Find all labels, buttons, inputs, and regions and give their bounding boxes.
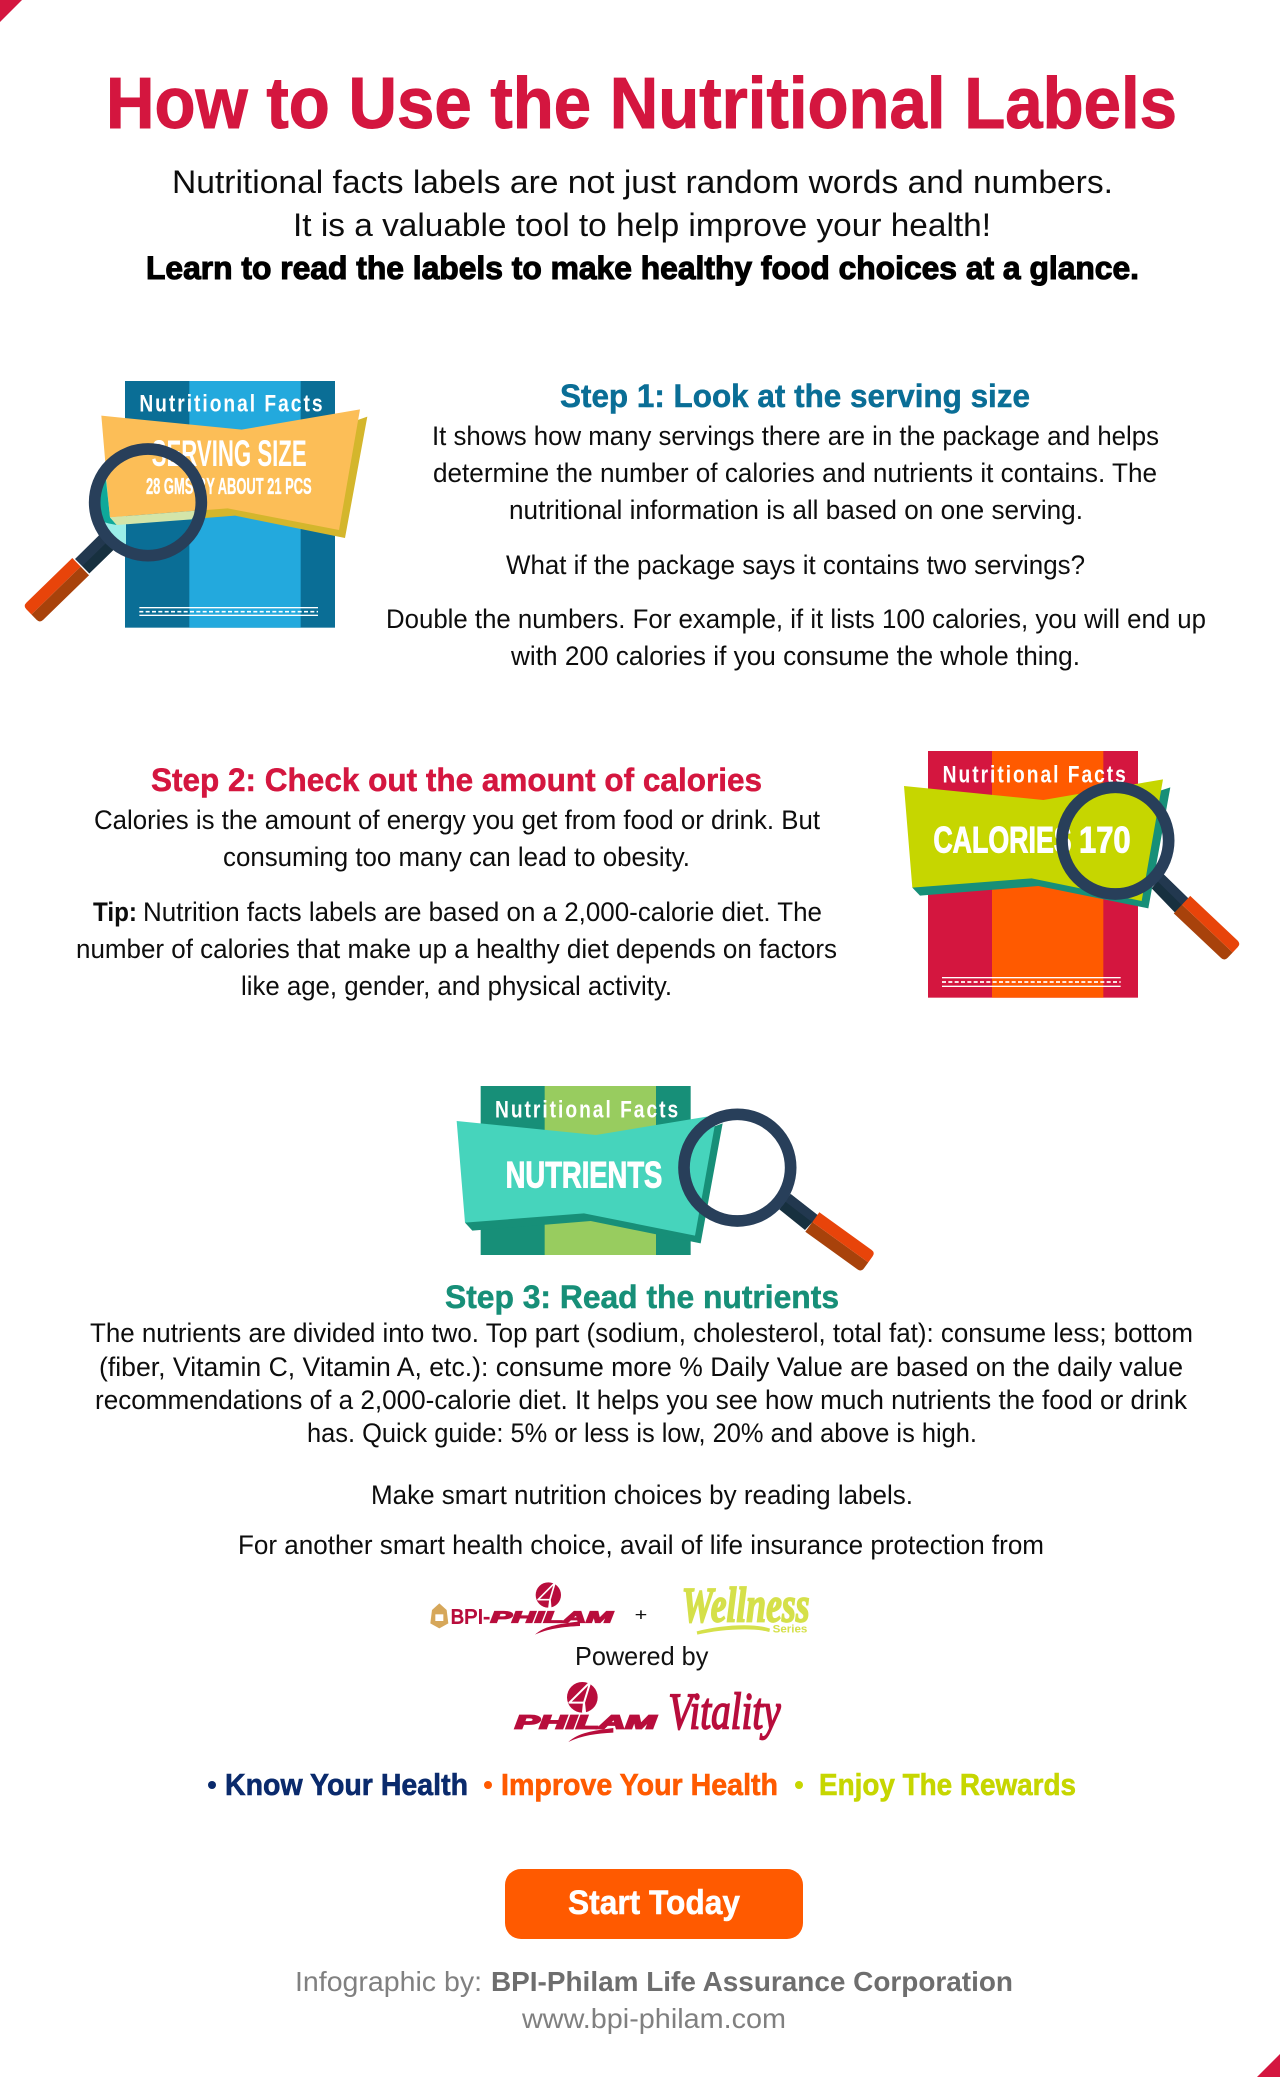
illustration: calories label with magnifier: CALORIES bbox=[933, 819, 1072, 860]
step 1 text: nutritional information is all based on one serving. bbox=[509, 495, 1083, 525]
illustration: serving size label with magnifier bbox=[23, 381, 367, 628]
illustration: calories label with magnifier bbox=[904, 751, 1241, 998]
credits bbox=[295, 1966, 1013, 2034]
step 2 text: Tip: bbox=[93, 897, 137, 927]
step 3 text bbox=[90, 1279, 1193, 1448]
step 2 text: Calories is the amount of energy you get from food or drink. But bbox=[94, 805, 821, 835]
logo: BPI-Philam: PHILAM bbox=[491, 1609, 615, 1626]
illustration: nutrients label with magnifier: NUTRIENTS bbox=[506, 1154, 662, 1195]
step 2 text: number of calories that make up a healthy diet depends on factors bbox=[76, 934, 837, 964]
title: How to Use the Nutritional Labels bbox=[106, 64, 1177, 144]
intro text block bbox=[146, 164, 1139, 286]
logo: Wellness Series bbox=[682, 1577, 810, 1636]
illustration: nutrients label with magnifier bbox=[457, 1086, 875, 1272]
corner accent: bottom right bbox=[1257, 2054, 1280, 2077]
illustration: serving size label with magnifier: Nutritional Facts bbox=[139, 390, 323, 417]
step 1 text: Double the numbers. For example, if it lists 100 calories, you will end up bbox=[386, 604, 1206, 634]
step 3 text: The nutrients are divided into two. Top part (sodium, cholesterol, total fat): consume less; bottom bbox=[90, 1318, 1193, 1348]
credits: BPI-Philam Life Assurance Corporation bbox=[491, 1966, 1013, 1997]
step 2 text bbox=[76, 762, 837, 1001]
step 1 text: What if the package says it contains two servings? bbox=[506, 550, 1085, 580]
logo: Wellness Series: Wellness bbox=[682, 1577, 810, 1633]
step 2 text: Step 2: Check out the amount of calories bbox=[151, 762, 762, 798]
step 3 text: has. Quick guide: 5% or less is low, 20% and above is high. bbox=[307, 1418, 977, 1448]
illustration: calories label with magnifier: Nutritional Facts bbox=[943, 761, 1126, 788]
credits: Infographic by: bbox=[295, 1966, 482, 1997]
closing text bbox=[238, 1480, 1044, 1560]
illustration: serving size label with magnifier: 28 GMS BY ABOUT 21 PCS bbox=[146, 473, 312, 499]
illustration: nutrients label with magnifier: Nutritional Facts bbox=[495, 1096, 678, 1123]
closing text: Make smart nutrition choices by reading labels. bbox=[371, 1480, 913, 1510]
illustration: serving size label with magnifier: SERVING SIZE bbox=[152, 433, 307, 474]
step 2 text: consuming too many can lead to obesity. bbox=[223, 842, 690, 872]
logo: Wellness Series: Series bbox=[773, 1624, 807, 1636]
step 3 text: recommendations of a 2,000-calorie diet. It helps you see how much nutrients the food or drink bbox=[95, 1385, 1188, 1415]
tagline row bbox=[208, 1767, 1076, 1802]
tagline row: Improve Your Health bbox=[501, 1767, 778, 1802]
step 3 text: Step 3: Read the nutrients bbox=[445, 1279, 839, 1315]
credits: www.bpi-philam.com bbox=[521, 2003, 786, 2034]
step 1 text: determine the number of calories and nutrients it contains. The bbox=[433, 458, 1157, 488]
tagline row: Know Your Health bbox=[225, 1767, 468, 1802]
step 1 text: Step 1: Look at the serving size bbox=[560, 378, 1030, 414]
intro text block: Learn to read the labels to make healthy food choices at a glance. bbox=[146, 250, 1139, 286]
tagline row: Enjoy The Rewards bbox=[819, 1767, 1076, 1802]
button: start today: Start Today bbox=[568, 1884, 740, 1922]
logos: BPI-Philam, Wellness Series, Philam Vitality bbox=[430, 1577, 810, 1742]
step 2 text: like age, gender, and physical activity. bbox=[241, 971, 672, 1001]
corner accent: top left bbox=[0, 0, 22, 22]
logo: Philam Vitality: PHILAM bbox=[515, 1711, 657, 1732]
step 3 text: (fiber, Vitamin C, Vitamin A, etc.): consume more % Daily Value are based on the daily value bbox=[99, 1352, 1183, 1382]
logo: Philam Vitality: Vitality bbox=[668, 1683, 781, 1740]
intro text block: It is a valuable tool to help improve your health! bbox=[293, 207, 991, 243]
step 1 text bbox=[386, 378, 1206, 671]
closing text: For another smart health choice, avail of life insurance protection from bbox=[238, 1530, 1044, 1560]
logo: BPI-Philam: BPI- bbox=[451, 1605, 490, 1628]
illustration: calories label with magnifier: 170 bbox=[1079, 819, 1131, 860]
plus sign: + bbox=[635, 1605, 647, 1625]
logo: BPI-Philam bbox=[430, 1582, 615, 1635]
button: start today bbox=[505, 1869, 803, 1939]
powered by: Powered by bbox=[575, 1641, 708, 1671]
step 2 text: Nutrition facts labels are based on a 2,000-calorie diet. The bbox=[143, 897, 822, 927]
logo: Philam Vitality bbox=[515, 1682, 781, 1742]
step 1 text: It shows how many servings there are in the package and helps bbox=[432, 421, 1159, 451]
step 1 text: with 200 calories if you consume the whole thing. bbox=[510, 641, 1080, 671]
intro text block: Nutritional facts labels are not just random words and numbers. bbox=[172, 164, 1113, 200]
